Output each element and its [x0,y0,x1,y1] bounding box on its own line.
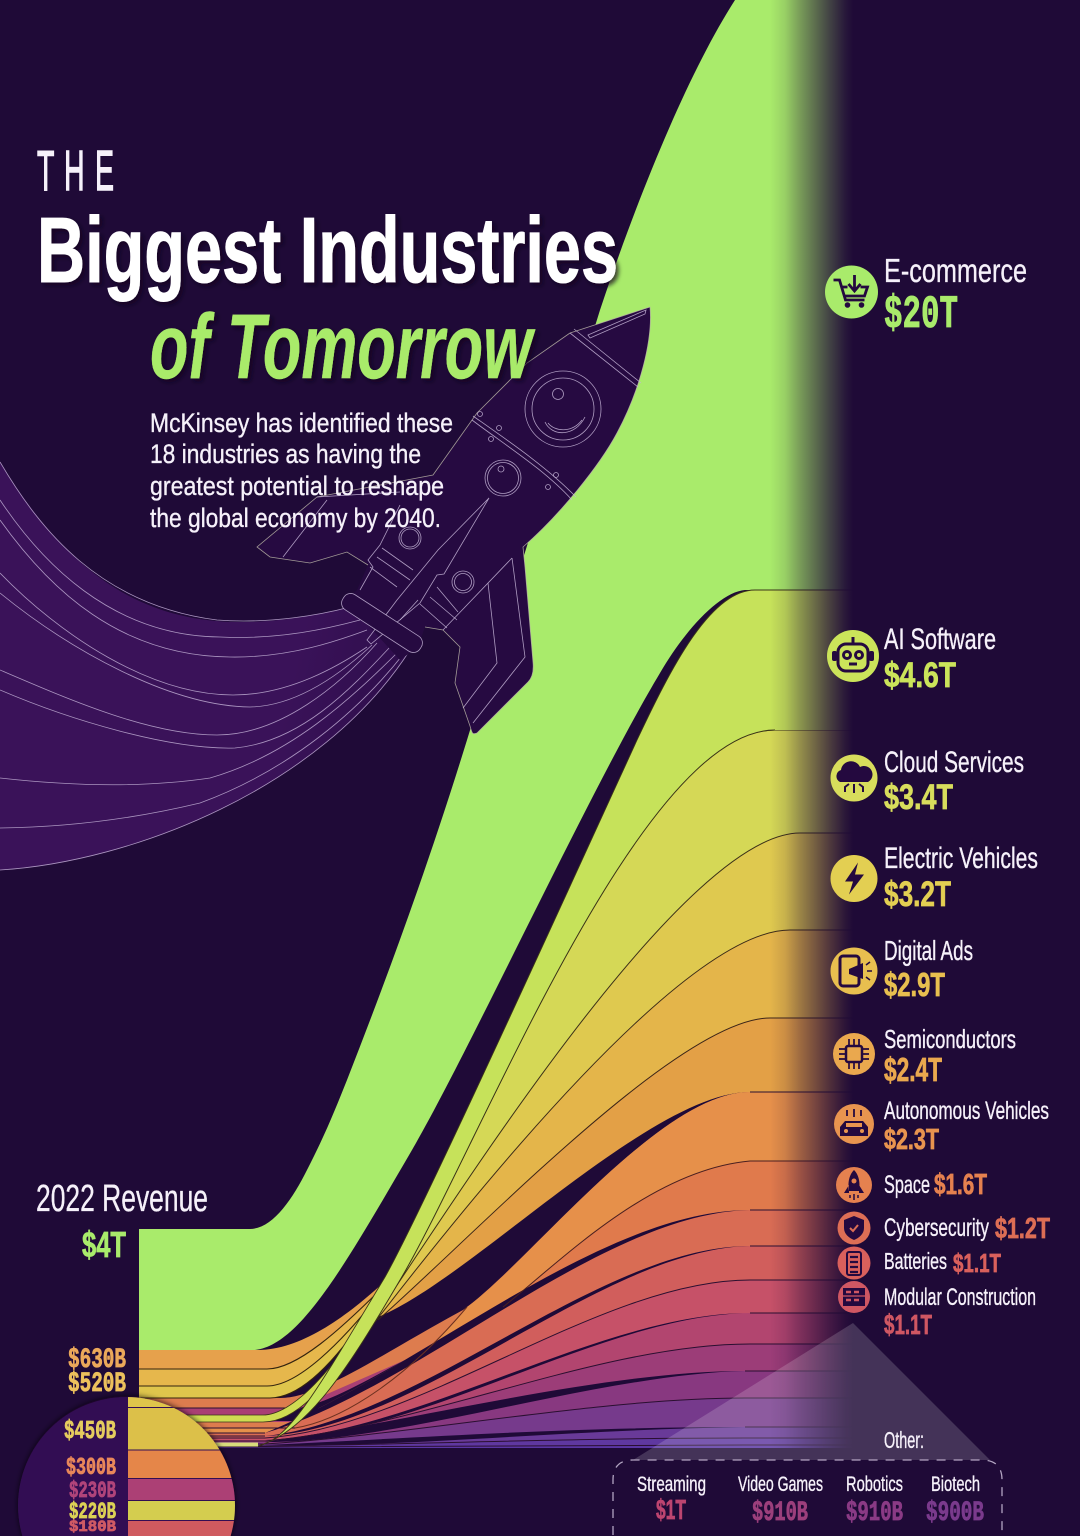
title [37,138,618,398]
band: thin purple three [139,1445,855,1448]
title: THE: THE [37,138,114,203]
value: 4T: $4T [82,1224,126,1265]
label: digital ads: Digital Ads [884,935,973,966]
other: biotech [926,1473,984,1529]
band: thin purple one [139,1427,855,1448]
label: e-commerce: $20T [884,289,958,341]
title: Biggest Industries: Biggest Industries [37,198,618,302]
strand: 630B [139,1283,392,1398]
strand dividers [139,1287,383,1398]
other dashed box [613,1460,1002,1535]
icon: car [834,1104,874,1144]
value: 450B: $450B [64,1416,116,1446]
value: 630B: $630B [68,1345,126,1376]
label: cloud services: Cloud Services [884,746,1024,779]
label: AI software: AI Software [884,623,996,656]
dark wedges between bands [265,1210,750,1445]
exhaust plume [0,462,410,870]
label: electric vehicles [830,842,1038,914]
label: semiconductors [833,1024,1016,1088]
band: biotech [139,1398,855,1448]
icon: lightning bolt [830,855,878,902]
label: electric vehicles: $3.2T [884,875,951,914]
intro paragraph [150,408,453,533]
nose details [570,329,641,387]
label: semiconductors: $2.4T [884,1051,942,1088]
intro paragraph: McKinsey has identified these [150,408,453,438]
rocket [257,307,650,734]
band: modular construction [139,1280,855,1448]
heading: 2022 Revenue: 2022 Revenue [36,1178,208,1220]
icon: battery [838,1246,870,1280]
label: cybersecurity: Cybersecurity [884,1214,989,1242]
AI strand tail [139,1442,258,1446]
band: AI software [258,590,855,1446]
intro paragraph: greatest potential to reshape [150,471,444,501]
other: video games: $910B [752,1498,808,1529]
band: semiconductors [378,1018,855,1448]
title: of Tomorrow: of Tomorrow [150,296,536,398]
label: cloud services: $3.4T [884,778,953,817]
band: space [497,1161,855,1448]
other: streaming: Streaming [637,1473,706,1496]
band: batteries [139,1246,855,1448]
other: biotech: $900B [926,1498,984,1529]
label: batteries [838,1246,1001,1280]
e-commerce green band [139,0,855,1350]
label: AI software [827,623,996,695]
porthole [485,460,521,496]
label: space: Space [884,1171,930,1199]
gap between bands [139,1092,855,1448]
icon: chip [833,1033,875,1075]
label: modular construction: $1.1T [884,1309,932,1340]
rocket hull fill [257,307,650,734]
label: digital ads: $2.9T [884,966,945,1003]
other: video games: Video Games [738,1473,823,1496]
band: electric vehicles [370,833,855,1448]
value: 300B: $300B [66,1455,116,1482]
icon: shield [838,1212,870,1244]
magnifier circle [18,1396,238,1536]
strand: 450B [139,1290,392,1398]
label: e-commerce: E-commerce [884,252,1027,289]
label: cloud services [830,746,1024,817]
band: autonomous vehicles [139,1092,855,1448]
other: biotech: Biotech [931,1473,980,1496]
intro paragraph: the global economy by 2040. [150,503,441,533]
icon: phone megaphone [830,948,878,994]
other: streaming [637,1473,706,1525]
label: batteries: $1.1T [953,1248,1001,1278]
nozzle lines [360,505,458,628]
other: streaming: $1T [656,1494,686,1525]
band: digital ads [375,930,855,1448]
right edge fade [770,0,860,1449]
icon: cloud [830,754,878,802]
centre fin [367,498,489,644]
band: 300B strand [139,1092,855,1448]
other: robotics: $910B [846,1498,903,1529]
band: streaming [139,1313,855,1448]
label: cybersecurity [838,1212,1050,1245]
value: 520B: $520B [68,1369,126,1400]
value: 220B: $220B [69,1499,116,1525]
strand: cloud services crossing [139,1285,385,1422]
flow bands [139,730,855,1448]
rocket outline [257,307,650,734]
value: 180B: $180B [69,1518,116,1536]
hull band [472,416,576,500]
icon: cart [825,266,878,318]
main window [525,371,601,447]
label: AI software: $4.6T [884,656,956,695]
AI band outlines [258,590,853,1446]
magnified strands [128,1396,238,1536]
label: e-commerce [825,252,1027,341]
divider lines [139,730,853,1447]
other: robotics: Robotics [846,1473,903,1496]
left 2022 strands [139,1283,392,1422]
icon: robot [827,630,879,682]
other: label: Other: [884,1427,924,1453]
nozzle rim [339,590,425,656]
right fin lines [443,558,525,723]
icon: modular building [838,1281,870,1313]
label: space [836,1167,987,1203]
label: space: $1.6T [934,1169,987,1201]
label: autonomous vehicles [834,1097,1049,1156]
other triangle [633,1323,990,1460]
icon: rocket [836,1167,872,1203]
strand: 520B [139,1287,392,1398]
label: cybersecurity: $1.2T [995,1213,1050,1245]
other: video games [738,1473,823,1529]
dark wedge [300,1360,405,1411]
intro paragraph: 18 industries as having the [150,439,421,469]
band: video games [139,1344,855,1448]
label: semiconductors: Semiconductors [884,1024,1016,1054]
band: robotics [139,1371,855,1448]
small dark wedge [275,1406,322,1421]
other: robotics [846,1473,903,1529]
label: digital ads [830,935,973,1003]
band: cybersecurity [139,1210,855,1448]
band: thin purple two [139,1438,855,1448]
2022 revenue labels [36,1178,208,1400]
value: 230B: $230B [69,1478,116,1504]
magnified value labels [64,1416,116,1536]
label: batteries: Batteries [884,1248,947,1274]
band: cloud services [370,730,855,1448]
label: modular construction [838,1281,1036,1340]
band: magenta strand [139,1360,405,1425]
label: autonomous vehicles: $2.3T [884,1124,939,1156]
left fin lines [283,492,400,557]
